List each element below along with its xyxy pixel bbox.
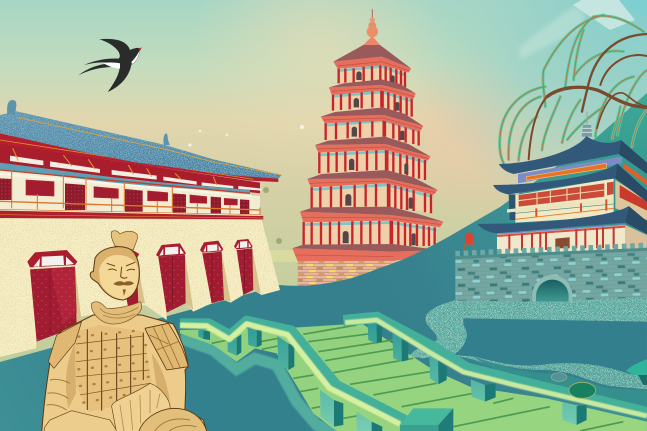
pagoda roofs [292, 36, 443, 261]
bridge [180, 317, 647, 431]
willow hanging strands [500, 15, 647, 163]
city wall arch gate [532, 275, 572, 302]
pagoda red pillars [304, 64, 435, 247]
lily pad: green [569, 382, 596, 398]
palace red plinth [0, 211, 263, 219]
palace lattice panels [0, 178, 249, 214]
door 5 [234, 239, 261, 295]
warrior body [42, 315, 207, 431]
palace stone wall [0, 218, 280, 357]
palace windows [26, 180, 237, 205]
tower middle storey [507, 178, 614, 223]
warrior knee [138, 408, 207, 431]
tower side orange strip [624, 163, 647, 185]
city wall [455, 248, 647, 302]
warrior scarf [91, 302, 142, 324]
tower top lantern [582, 112, 592, 137]
willow main branches [529, 34, 647, 159]
lily pad: blue [551, 373, 567, 381]
pagoda: Giant Wild Goose Pagoda [292, 9, 443, 292]
tower blue frieze [518, 157, 622, 183]
bridge lower edge glow [180, 338, 340, 431]
landscape: teal hill [0, 93, 647, 431]
landscape: upper green hill behind bell tower [590, 93, 647, 250]
door 1 [27, 250, 81, 342]
pagoda finial [367, 9, 378, 37]
palace white frieze panels [10, 148, 262, 191]
pond bank [410, 293, 647, 407]
bridge deck slats [212, 325, 623, 431]
bell tower [455, 112, 647, 302]
pond island [473, 357, 647, 389]
tower roofs [478, 136, 647, 234]
warrior arm shading [66, 343, 170, 408]
tower right-side faces [615, 180, 647, 250]
palace railing [0, 170, 260, 215]
palace lower storey [0, 163, 260, 216]
willow leaves [500, 15, 647, 163]
door 4 [200, 241, 231, 303]
tower orange bar [526, 163, 606, 180]
palace: Daming Palace hall [0, 100, 282, 357]
terracotta warrior [42, 231, 207, 431]
pagoda cyan friezes [303, 66, 437, 230]
bridge corner post cap [400, 408, 453, 431]
pavilion roof at right [626, 359, 647, 385]
warrior topknot [111, 231, 138, 250]
tower lower storey [497, 225, 625, 254]
pond lower shallows [473, 357, 647, 410]
door 2 hidden behind warrior [120, 249, 145, 308]
pagoda walls [303, 63, 437, 247]
warrior armour plate [75, 325, 152, 412]
warrior head [90, 247, 139, 300]
bridge front railing [180, 321, 407, 424]
landscape: pond with speckled bank [410, 293, 647, 410]
bridge deck [180, 323, 647, 431]
warrior sleeve [112, 383, 170, 431]
palace frieze [0, 143, 260, 193]
door 3 [156, 243, 193, 313]
pagoda arched windows [343, 71, 416, 245]
palace main roof [0, 100, 282, 182]
icon: swallow in flight [78, 39, 142, 92]
warrior forearm [43, 379, 118, 431]
pond water [453, 318, 647, 400]
bridge posts [198, 322, 587, 431]
tree: willow [500, 15, 647, 163]
warrior right shoulder guard [145, 323, 188, 370]
red lantern on wall [464, 232, 474, 252]
city wall crenellations [455, 246, 647, 258]
bridge back railing [343, 317, 647, 416]
warrior left shoulder guard [48, 322, 82, 368]
pagoda brick base [298, 261, 396, 292]
